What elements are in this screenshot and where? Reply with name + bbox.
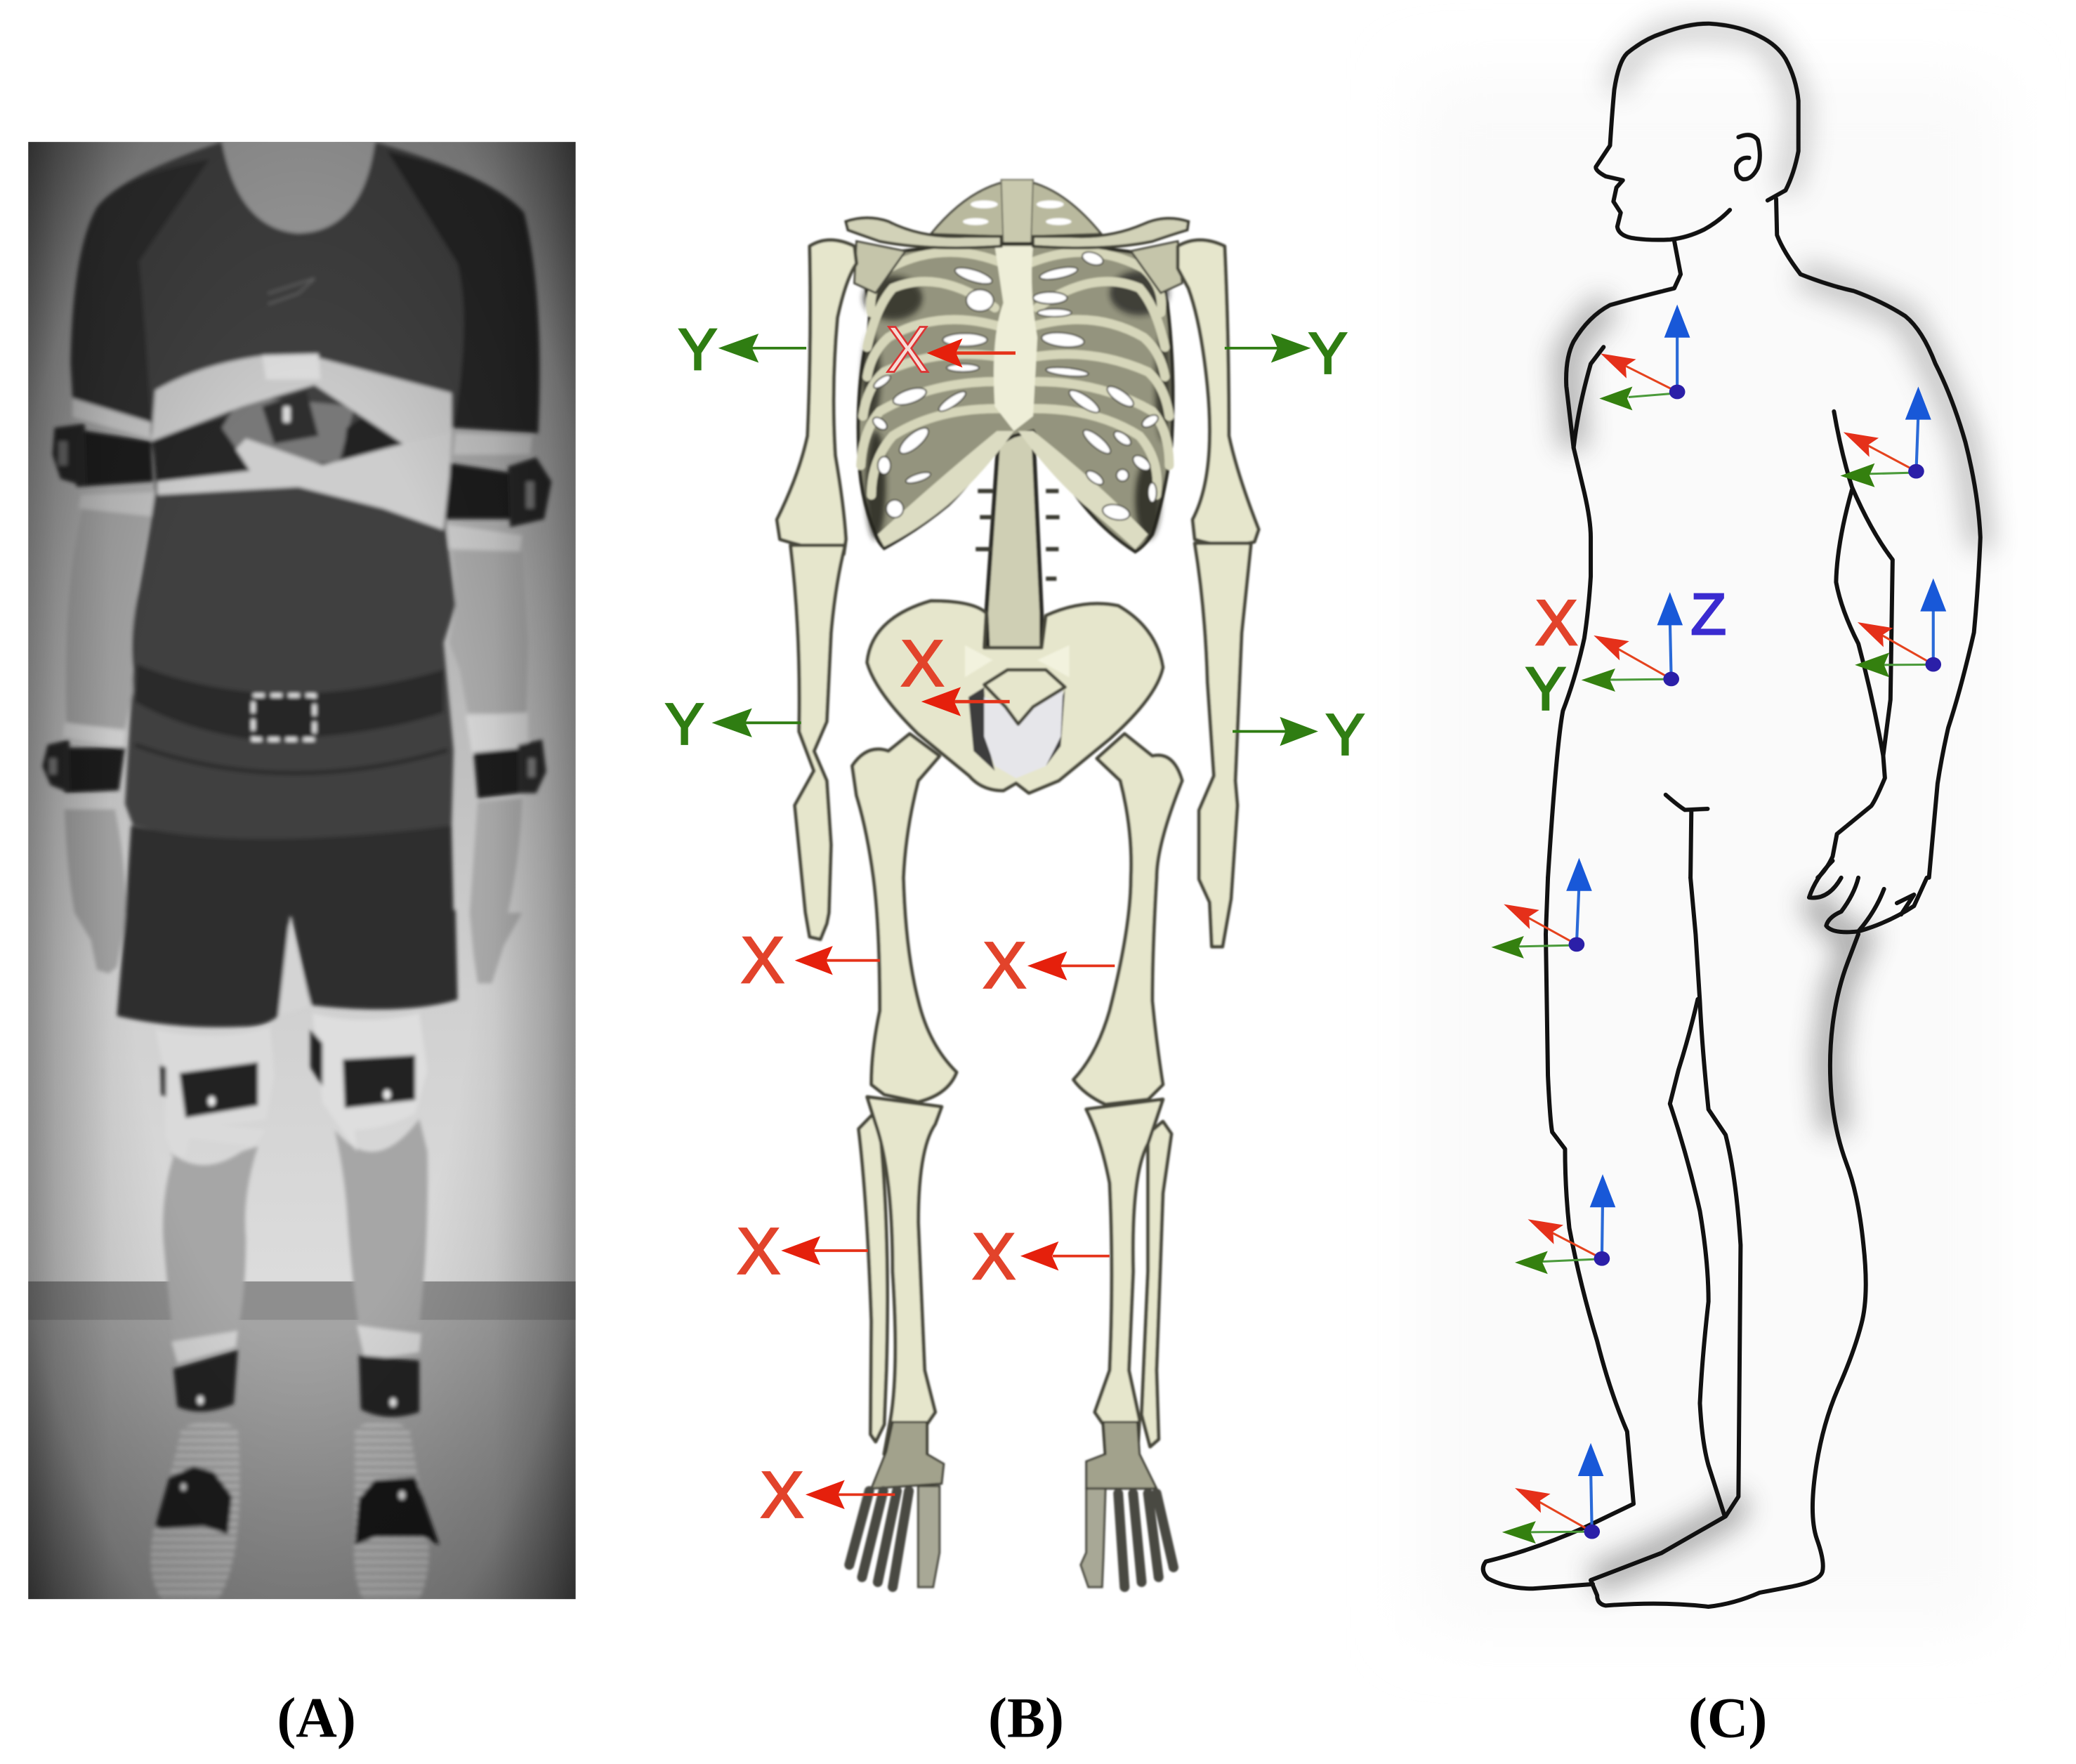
body outline upper	[1548, 23, 1980, 878]
left knee sensor	[155, 1027, 274, 1157]
soft background haze	[1417, 79, 1999, 1628]
panel A: photo of subject wearing sensors	[28, 138, 576, 1600]
green Y arrow: lower left arm: Y	[665, 691, 704, 756]
panel C: body outline with sensor axes	[1417, 23, 1999, 1628]
left sleeve	[70, 159, 210, 423]
photo vignette	[28, 142, 576, 1599]
arm gap	[1836, 489, 1883, 756]
photo floor	[28, 1282, 576, 1599]
skeleton	[777, 180, 1259, 1587]
rib holes	[871, 250, 1159, 522]
upper rib arcs at neck	[931, 182, 1101, 237]
socks	[150, 1421, 429, 1600]
green Y arrow: upper left arm	[678, 317, 806, 382]
axes: waist sensor with XYZ labels: X	[1535, 588, 1577, 659]
left ribs	[861, 252, 1014, 547]
left fibula	[859, 1110, 888, 1442]
red X arrow: chest: X	[886, 313, 929, 386]
chest front	[1548, 241, 1681, 878]
t-shirt	[115, 142, 480, 842]
right humerus	[1178, 240, 1259, 545]
upper glow strokes	[1567, 29, 1980, 548]
left femur	[853, 734, 957, 1102]
red X arrow: left shin	[737, 1215, 868, 1288]
neck and shoulders	[1776, 199, 1980, 878]
clavicles	[846, 218, 1188, 248]
right forearm and hand	[1195, 544, 1251, 947]
lower glow strokes	[1593, 895, 1858, 1580]
shirt fold	[135, 745, 447, 773]
red X arrow: left shin: X	[737, 1215, 780, 1288]
lumbar spine	[975, 431, 1060, 657]
left arm with straps	[42, 398, 155, 913]
left forearm and hand	[791, 545, 845, 940]
waist sensor dashed box	[254, 695, 315, 739]
green Y arrow: lower right arm	[1233, 702, 1365, 768]
axes: upper arm sensor	[1840, 386, 1931, 487]
shorts top	[125, 825, 454, 917]
chest bandage	[151, 354, 452, 530]
rib shadows	[862, 271, 1171, 539]
outline glow	[1567, 29, 1980, 1580]
right tibia	[1086, 1100, 1163, 1454]
axes: thigh sensor	[1491, 858, 1592, 959]
caption A: (A)	[277, 1686, 356, 1749]
axes: waist sensor with XYZ labels: Y	[1525, 655, 1566, 723]
hand fingers	[1809, 861, 1927, 932]
left humerus	[777, 240, 857, 554]
rib cage base	[855, 244, 1173, 552]
hands	[74, 913, 522, 983]
armpit	[1574, 347, 1603, 448]
red X arrow: right thigh: X	[983, 928, 1026, 1001]
subject upper body	[42, 138, 551, 917]
ear	[1736, 135, 1760, 179]
red X arrow: right thigh	[983, 928, 1115, 1001]
green Y arrow: upper left arm: Y	[678, 317, 717, 382]
foot sensors	[155, 1466, 440, 1545]
head	[1596, 23, 1799, 240]
red X arrow: chest	[886, 313, 1016, 386]
body outline lower	[1483, 861, 1927, 1607]
axes: shin sensor	[1515, 1174, 1615, 1274]
green Y arrow: upper right arm	[1225, 321, 1348, 386]
right knee sensor	[310, 1013, 427, 1152]
axes: chest sensor	[1599, 305, 1690, 410]
left foot	[849, 1422, 944, 1587]
red X arrow: foot: X	[761, 1458, 803, 1531]
left tibia	[867, 1097, 942, 1454]
cervical spine	[1001, 180, 1033, 246]
right fibula	[1142, 1121, 1171, 1447]
calves	[163, 1119, 428, 1341]
axes: forearm sensor	[1855, 578, 1946, 677]
shorts legs	[117, 910, 458, 1027]
red X arrow: pelvis: X	[901, 627, 944, 700]
subject lower body	[74, 910, 522, 1600]
red X arrow: foot	[761, 1458, 895, 1531]
panel B: skeleton with sensor axes	[665, 180, 1365, 1587]
green Y arrow: lower left arm	[665, 691, 801, 756]
skeleton lower body	[849, 734, 1182, 1587]
right arm with straps	[445, 433, 551, 913]
waist belt	[135, 664, 443, 739]
axes: foot sensor	[1502, 1443, 1603, 1544]
chest sensor under straps	[151, 390, 403, 482]
inner back leg	[1670, 999, 1725, 1516]
red X arrow: left thigh: X	[741, 923, 784, 996]
axes: waist sensor with XYZ labels	[1525, 581, 1726, 723]
right foot	[1081, 1422, 1174, 1587]
red X arrow: right shin	[972, 1220, 1110, 1293]
shoulder blades	[855, 242, 1182, 293]
red X arrow: pelvis	[901, 627, 1010, 716]
red X arrow: right shin: X	[972, 1220, 1016, 1293]
sternum	[994, 246, 1037, 431]
right ribs	[1018, 252, 1169, 549]
green Y arrow: upper right arm: Y	[1308, 321, 1348, 386]
right sleeve	[387, 151, 539, 433]
caption B: (B)	[988, 1686, 1064, 1749]
near leg and foot	[1483, 878, 1634, 1588]
groin line	[1666, 795, 1707, 878]
pelvis	[867, 601, 1163, 793]
axes: waist sensor with XYZ labels: Z	[1690, 581, 1726, 647]
right femur	[1074, 734, 1182, 1105]
back leg	[1591, 878, 1866, 1607]
inner arm	[1818, 412, 1893, 878]
ankle sensors	[171, 1325, 421, 1417]
red X arrow: left thigh	[741, 923, 880, 996]
photo wall background	[28, 142, 576, 1283]
neck	[222, 138, 377, 233]
shirt logo	[268, 278, 315, 304]
caption C: (C)	[1688, 1686, 1767, 1749]
skeleton upper body	[777, 180, 1259, 947]
subject figure	[42, 138, 551, 1600]
green Y arrow: lower right arm: Y	[1326, 702, 1365, 768]
